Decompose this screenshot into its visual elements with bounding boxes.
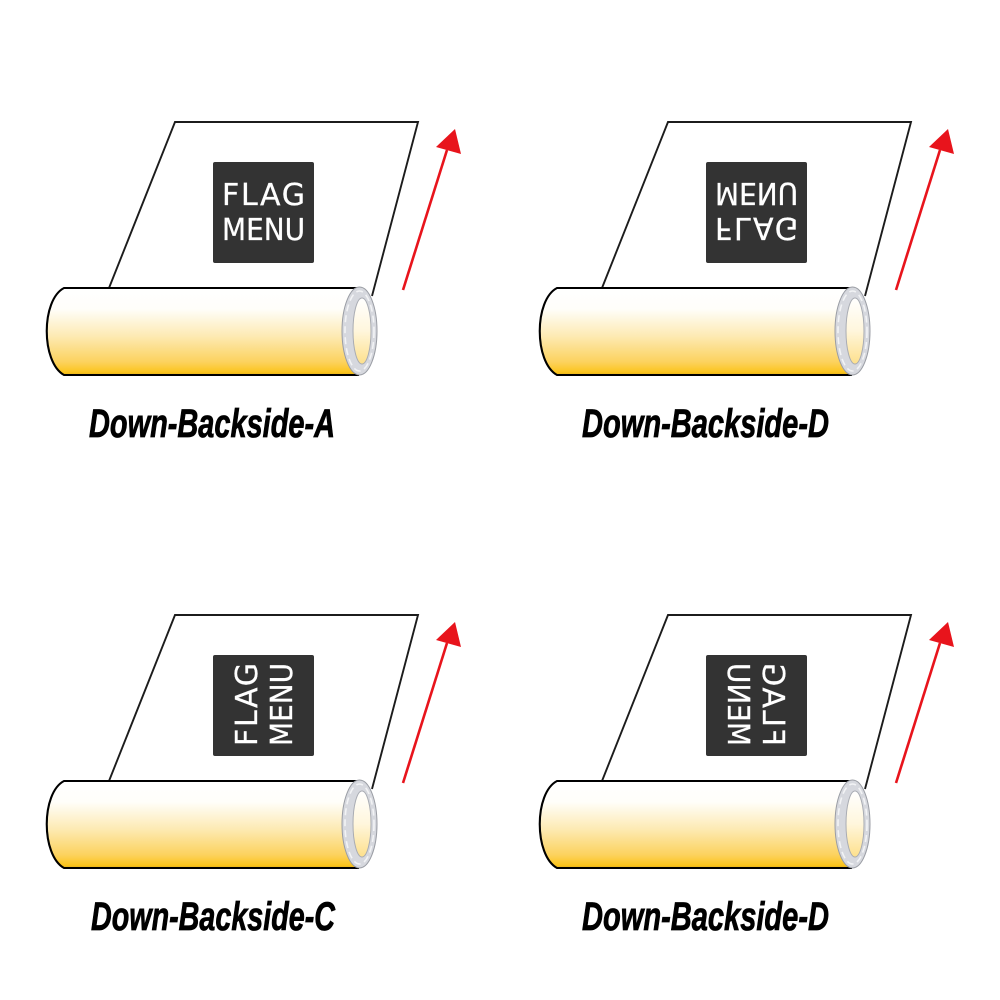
flag menu label, rotated and mirrored <box>706 655 807 756</box>
panel: Down-Backside-C <box>47 615 461 939</box>
roll <box>540 287 870 375</box>
caption: Down-Backside-D <box>582 895 829 939</box>
flag menu label, rotated and mirrored: FLAG <box>755 663 790 746</box>
sheet <box>602 122 911 296</box>
caption: Down-Backside-A <box>89 402 335 446</box>
sheet <box>602 615 911 789</box>
caption: Down-Backside-D <box>582 402 829 446</box>
panel: Down-Backside-D bottom right <box>540 615 954 939</box>
flag menu label, flipped vertically: MENU <box>715 175 798 210</box>
arrow <box>403 129 461 290</box>
panel: Down-Backside-D top right <box>540 122 954 446</box>
panel: Down-Backside-A <box>47 122 461 446</box>
caption: Down-Backside-C <box>91 895 336 939</box>
flag menu label, rotated <box>213 655 314 756</box>
flag menu label <box>213 162 314 263</box>
arrow <box>896 622 954 783</box>
flag menu label: MENU <box>222 213 305 248</box>
flag menu label, flipped vertically: FLAG <box>715 210 798 245</box>
arrow <box>896 129 954 290</box>
arrow <box>403 622 461 783</box>
flag menu label: FLAG <box>222 178 305 213</box>
flag menu label, rotated: FLAG <box>230 663 265 746</box>
flag menu label, flipped vertically <box>706 162 807 263</box>
sheet <box>109 615 418 789</box>
flag menu label, rotated and mirrored: MENU <box>720 663 755 746</box>
roll <box>47 780 377 868</box>
flag menu label, rotated: MENU <box>265 663 300 746</box>
roll <box>540 780 870 868</box>
roll <box>47 287 377 375</box>
sheet <box>109 122 418 296</box>
